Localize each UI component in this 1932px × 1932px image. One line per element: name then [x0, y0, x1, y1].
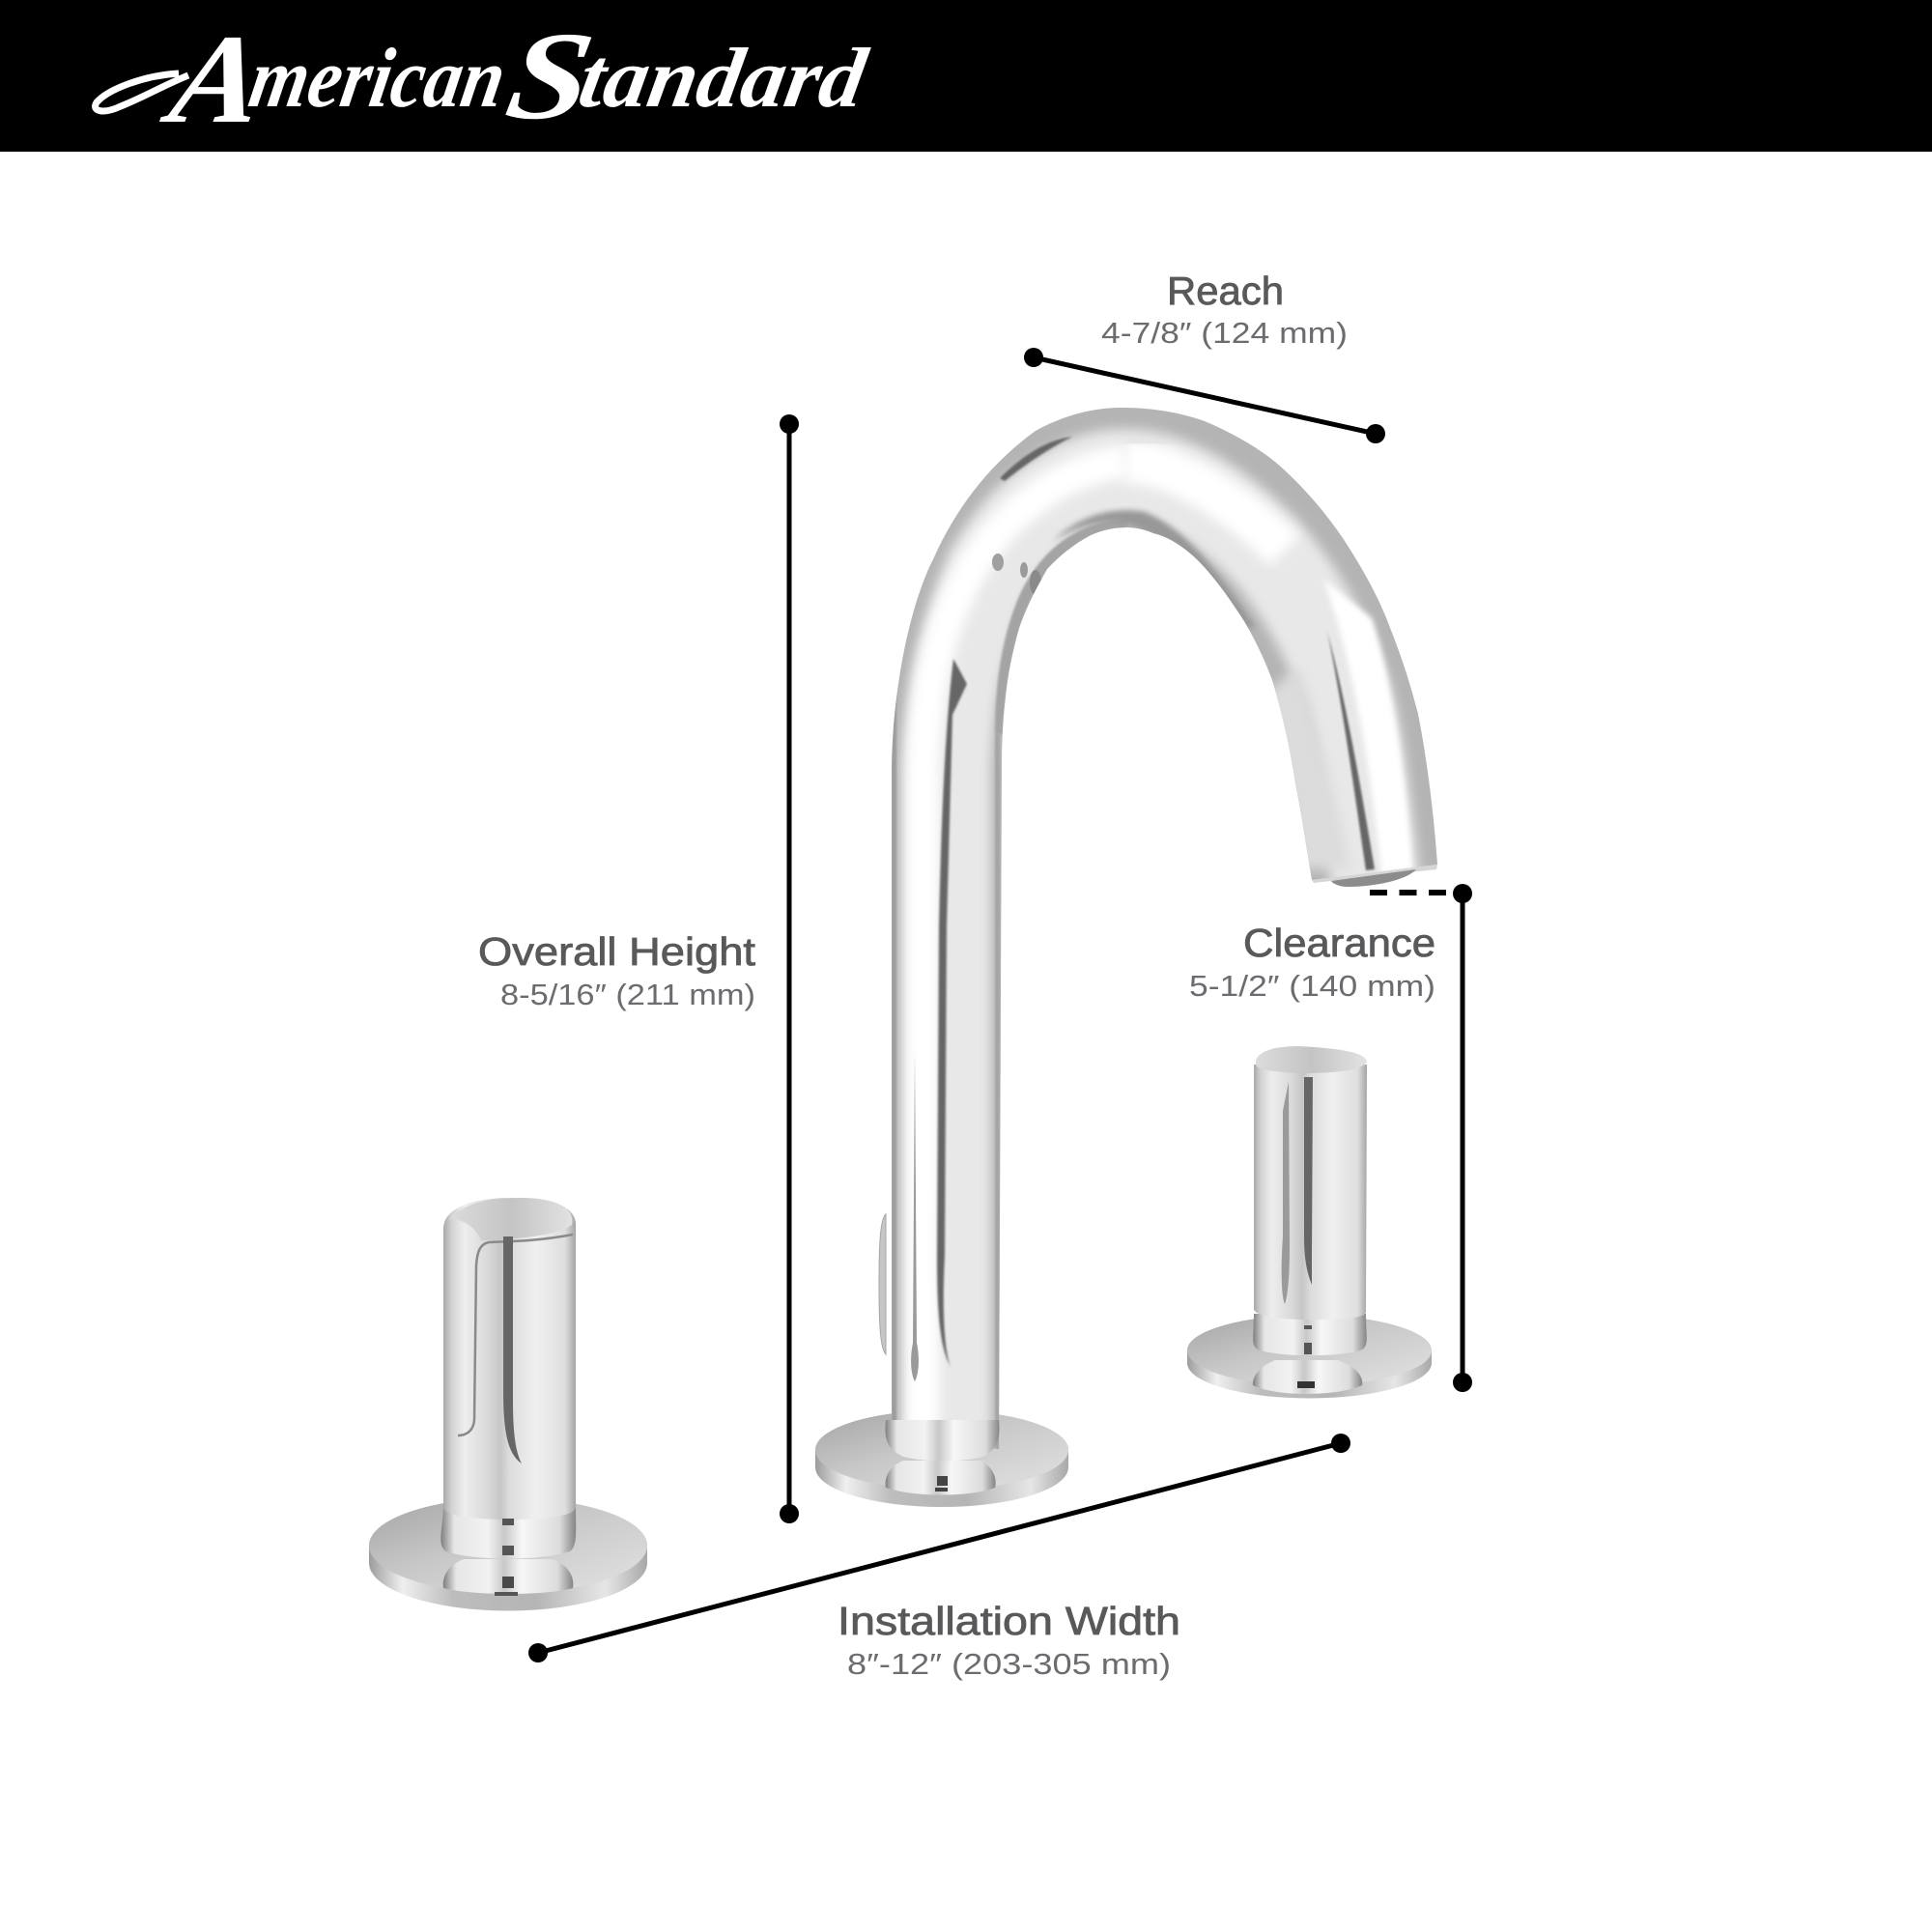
logo: American Standard: S [497, 7, 603, 146]
reach heading: Reach [1167, 269, 1284, 313]
right handle cylinder [1254, 1065, 1367, 1320]
clearance value: 5-1/2″ (140 mm) [1189, 969, 1435, 1003]
side lift rod [879, 1214, 886, 1354]
overall height heading: Overall Height [478, 929, 756, 974]
right handle cap [1256, 1046, 1367, 1073]
faucet collar [885, 1420, 999, 1461]
left handle groove [458, 1235, 573, 1435]
clearance heading: Clearance [1243, 921, 1435, 965]
right handle [1187, 1046, 1432, 1399]
installation width value: 8″-12″ (203-305 mm) [847, 1647, 1171, 1681]
faucet illustration [369, 408, 1437, 1610]
logo: American Standard: A [155, 8, 275, 150]
spout tip edge [1312, 865, 1437, 883]
right handle reflection [1304, 1077, 1313, 1285]
right handle dome [1253, 1360, 1362, 1394]
dimension: reach [1024, 269, 1385, 443]
right handle base plate [1187, 1316, 1432, 1399]
dimension: clearance [1189, 884, 1472, 1392]
overall height value: 8-5/16″ (211 mm) [500, 978, 755, 1011]
logo: American Standard [96, 7, 874, 150]
logo: American Standard: tandard [573, 32, 874, 126]
header band [0, 0, 1932, 152]
installation width heading: Installation Width [838, 1599, 1180, 1643]
left handle base plate [369, 1497, 647, 1610]
logo: American Standard: merican [243, 32, 513, 126]
left handle [369, 1198, 647, 1610]
reach value: 4-7/8″ (124 mm) [1101, 316, 1348, 350]
dimension: installation width [528, 1434, 1350, 1681]
spout [892, 408, 1437, 1459]
left handle reflection [503, 1236, 522, 1463]
right handle collar [1253, 1314, 1367, 1355]
left handle dome [443, 1559, 573, 1594]
left handle cap [449, 1198, 572, 1240]
aerator [1331, 869, 1416, 887]
left handle collar [440, 1507, 576, 1559]
dimension: overall height [478, 414, 799, 1523]
left handle cylinder [443, 1198, 576, 1520]
faucet centre dome [886, 1461, 996, 1495]
faucet centre base plate [815, 1410, 1068, 1507]
